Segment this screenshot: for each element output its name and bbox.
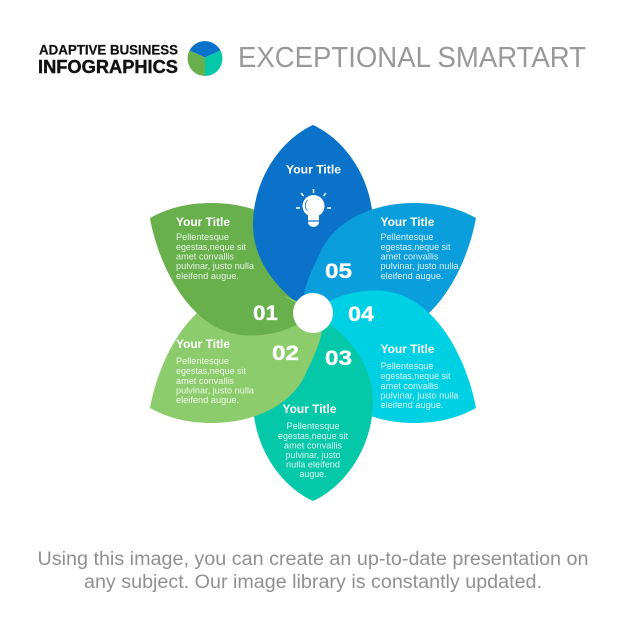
brand title: ADAPTIVE BUSINESS <box>39 42 178 58</box>
petal 02 <box>150 290 322 423</box>
panel text 05: eleifend augue. <box>380 270 444 281</box>
panel text 04: pulvinar, justo nulla <box>380 390 459 400</box>
footer description <box>38 549 588 593</box>
panel text 05 <box>380 215 459 281</box>
petal 03 <box>253 313 373 501</box>
panel text 04: eleifend augue. <box>380 399 444 410</box>
number 05: 05 <box>325 260 352 283</box>
panel text 02: egestas,neque sit <box>176 365 246 376</box>
footer description: any subject. Our image library is constantly updated. <box>84 572 542 593</box>
brand title <box>38 42 178 77</box>
panel text 03: egestas,neque sit <box>278 430 348 441</box>
panel text 01: eleifend augue. <box>176 270 239 281</box>
brand title: INFOGRAPHICS <box>38 57 178 77</box>
petal 05 <box>304 203 476 336</box>
panel text 05: egestas,neque sit <box>380 241 451 252</box>
panel text 03: pulvinar, justo <box>286 449 340 460</box>
number 02: 02 <box>272 342 299 365</box>
panel text 04 <box>380 342 459 410</box>
number 03: 03 <box>325 347 352 370</box>
centre circle <box>293 293 333 333</box>
panel text 05: pulvinar, justo nulla <box>380 260 459 271</box>
panel text 02 <box>176 337 255 405</box>
panel text 05: Pellentesque <box>380 231 434 242</box>
petal top <box>253 125 373 313</box>
footer description: Using this image, you can create an up-to-date presentation on <box>38 549 588 570</box>
panel text 02: amet convallis <box>176 375 234 386</box>
panel text 02: Your Title <box>176 337 230 351</box>
icon: light bulb <box>296 189 331 227</box>
panel text 04: egestas,neque sit <box>380 370 451 381</box>
number 01: 01 <box>253 302 278 325</box>
panel text 01: Pellentesque <box>176 231 229 242</box>
panel text 03 <box>278 402 348 479</box>
panel text 05: Your Title <box>380 215 435 229</box>
main heading: EXCEPTIONAL SMARTART <box>238 42 586 74</box>
panel text 03: nulla eleifend <box>286 458 340 470</box>
panel text 05: amet convallis <box>380 250 439 262</box>
panel text 04: Your Title <box>380 342 435 356</box>
panel text 04: Pellentesque <box>380 360 434 371</box>
panel text 01: Your Title <box>176 215 230 229</box>
panel text 02: eleifend augue. <box>176 394 239 405</box>
panel text 03: augue. <box>300 468 326 479</box>
panel text 03: amet convallis <box>284 440 342 450</box>
number 04: 04 <box>348 303 374 326</box>
panel text 01: amet convallis <box>176 250 234 262</box>
panel text 03: Your Title <box>282 402 337 416</box>
petal 01 base <box>150 203 322 336</box>
flower diagram petals <box>150 125 476 501</box>
panel text 03: Pellentesque <box>286 420 340 431</box>
panel text 04: amet convallis <box>380 380 439 391</box>
panel text 01: egestas,neque sit <box>176 241 246 252</box>
panel text 01 <box>176 215 255 281</box>
top petal text: Your Title <box>286 162 341 176</box>
icon: brand logo circle <box>188 41 222 76</box>
panel text 01: pulvinar, justo nulla <box>176 260 255 271</box>
petal 01 overlap on petal 02 <box>150 218 297 336</box>
panel text 02: pulvinar, justo nulla <box>176 384 255 396</box>
panel text 02: Pellentesque <box>176 355 229 366</box>
petal 04 <box>304 290 476 423</box>
